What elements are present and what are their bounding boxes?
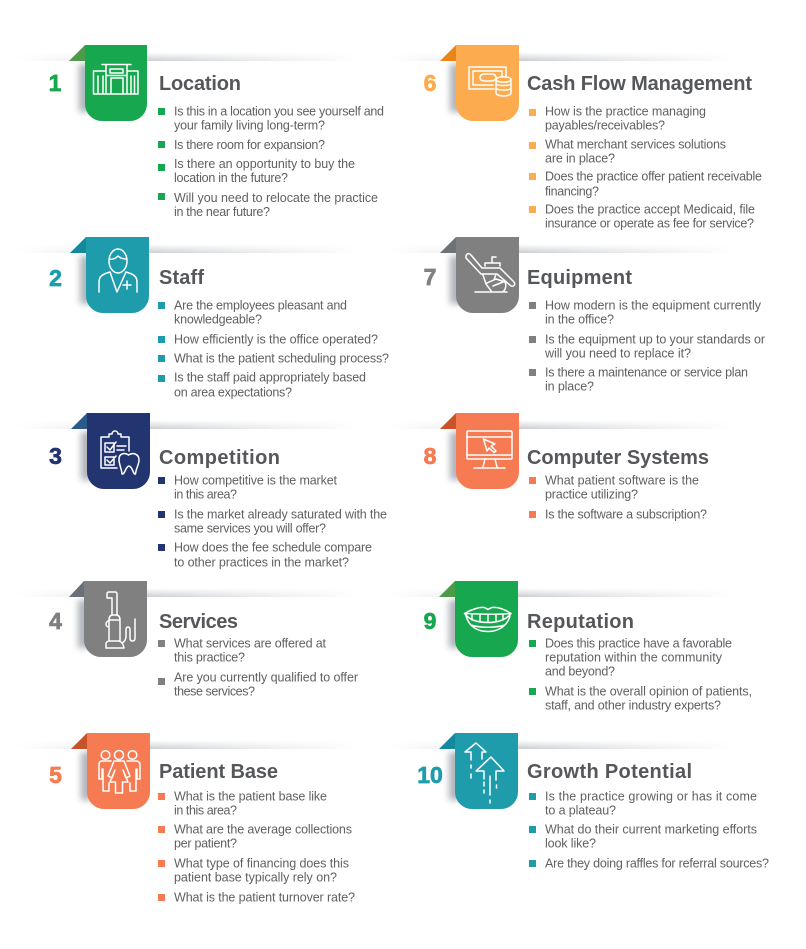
icon tab [455, 581, 518, 657]
checklist: Cash Flow Management: Does the practice accept Medicaid, file [545, 202, 755, 216]
checklist: Cash Flow Management: are in place? [545, 152, 615, 166]
checklist: Equipment: How modern is the equipment currently [545, 298, 762, 312]
card 9: Reputation [390, 581, 752, 712]
number 5: 5 [49, 762, 62, 788]
tab fold [70, 237, 86, 253]
icon: computer monitor [467, 431, 512, 468]
checklist: Staff [158, 298, 389, 400]
icon tab [85, 45, 147, 121]
checklist: Competition: Is the market already saturated with the [174, 508, 387, 522]
number 2: 2 [49, 265, 62, 291]
checklist: Services [158, 636, 358, 698]
checklist: Reputation: Does this practice have a favorable [545, 636, 732, 650]
checklist: Staff: knowledgeable? [174, 312, 262, 326]
checklist: Staff: on area expectations? [174, 386, 292, 400]
tab fold [440, 413, 456, 429]
checklist: Patient Base: in this area? [174, 804, 237, 818]
checklist: Services: these services? [174, 684, 255, 698]
checklist: Location: Is there room for expansion? [174, 138, 325, 152]
heading: Computer Systems: Computer Systems [527, 447, 709, 469]
checklist: Growth Potential: look like? [545, 836, 596, 850]
checklist: Location: location in the future? [174, 171, 288, 185]
number 4: 4 [49, 608, 62, 634]
checklist: Computer Systems: Is the software a subscription? [545, 508, 707, 522]
checklist: Location: Is there an opportunity to buy the [174, 157, 355, 171]
icon tab [87, 413, 150, 489]
icon: dental chair [466, 254, 515, 292]
checklist: Competition: How competitive is the market [174, 474, 338, 488]
checklist: Cash Flow Management: insurance or operate as fee for service? [545, 216, 754, 230]
tab fold [69, 45, 85, 61]
checklist: Equipment [529, 298, 765, 394]
heading: Cash Flow Management: Cash Flow Management [527, 73, 752, 95]
checklist: Location: Is this in a location you see yourself and [174, 104, 384, 118]
checklist: Growth Potential [529, 790, 769, 870]
heading: Patient Base: Patient Base [159, 761, 278, 783]
checklist: Equipment: Is there a maintenance or service plan [545, 366, 748, 380]
tab fold [440, 237, 456, 253]
checklist: Growth Potential: Are they doing raffles for referral sources? [545, 856, 769, 870]
number 6: 6 [424, 70, 436, 96]
checklist: Competition: in this area? [174, 488, 237, 502]
number 9: 9 [424, 608, 436, 634]
heading: Services: Services [159, 611, 238, 633]
checklist: Cash Flow Management: financing? [545, 184, 599, 198]
card 7: Equipment [390, 237, 765, 394]
checklist: Cash Flow Management: What merchant services solutions [545, 138, 726, 152]
tab fold [439, 581, 455, 597]
card 1: Location [48, 45, 384, 216]
checklist: Location: your family living long-term? [174, 118, 325, 132]
icon: building [94, 64, 138, 94]
checklist: Competition [158, 474, 387, 570]
icon: clipboard and tooth [101, 431, 139, 474]
tab fold [71, 413, 87, 429]
checklist: Equipment: Is the equipment up to your standards or [545, 332, 765, 346]
checklist: Reputation [529, 636, 752, 712]
card 6: Cash Flow Management [390, 45, 762, 230]
checklist: Staff: What is the patient scheduling process? [174, 352, 389, 366]
icon tab [455, 733, 518, 809]
checklist: Patient Base: What is the patient turnover rate? [174, 890, 355, 904]
checklist: Competition: to other practices in the market? [174, 556, 349, 570]
checklist: Patient Base [158, 790, 355, 904]
heading: Growth Potential: Growth Potential [527, 761, 692, 783]
checklist: Reputation: reputation within the community [545, 650, 723, 664]
heading: Competition: Competition [159, 447, 280, 469]
checklist: Competition: How does the fee schedule compare [174, 540, 372, 554]
checklist: Services: Are you currently qualified to offer [174, 670, 358, 684]
checklist: Services: this practice? [174, 650, 245, 664]
tab fold [440, 45, 456, 61]
card 2: Staff [15, 237, 389, 400]
checklist: Cash Flow Management [529, 104, 762, 230]
card 10: Growth Potential [390, 733, 769, 870]
checklist: Cash Flow Management: How is the practice managing [545, 104, 706, 118]
checklist: Reputation: and beyond? [545, 664, 615, 678]
heading: Reputation: Reputation [527, 611, 634, 633]
tab fold [439, 733, 455, 749]
icon tab [456, 45, 519, 121]
icon: banknote and coins [469, 67, 511, 96]
icon: smiling lips [464, 607, 511, 632]
icon tab [87, 733, 150, 809]
tab fold [71, 733, 87, 749]
heading: Staff: Staff [159, 267, 204, 289]
checklist: Computer Systems: What patient software is the [545, 474, 699, 488]
checklist: Staff: Is the staff paid appropriately based [174, 370, 366, 384]
checklist: Cash Flow Management: payables/receivables? [545, 118, 665, 132]
checklist: Services: What services are offered at [174, 636, 327, 650]
card 8: Computer Systems [424, 413, 708, 521]
checklist: Patient Base: per patient? [174, 836, 237, 850]
checklist: Competition: same services you will offer? [174, 522, 326, 536]
checklist: Patient Base: What type of financing does this [174, 856, 349, 870]
checklist: Growth Potential: to a plateau? [545, 804, 616, 818]
icon: growth arrows [465, 743, 504, 803]
icon tab [86, 237, 149, 313]
icon: vacuum cleaner [106, 592, 135, 648]
checklist: Equipment: in the office? [545, 312, 614, 326]
checklist: Staff: How efficiently is the office operated? [174, 332, 378, 346]
checklist: Equipment: will you need to replace it? [544, 346, 691, 360]
checklist: Reputation: staff, and other industry experts? [545, 698, 721, 712]
checklist: Growth Potential: What do their current marketing efforts [545, 822, 757, 836]
checklist: Reputation: What is the overall opinion of patients, [545, 684, 752, 698]
icon tab [84, 581, 147, 657]
card 3: Competition [15, 413, 387, 570]
icon: group of people [99, 750, 140, 793]
card 4: Services [48, 581, 358, 696]
checklist: Staff: Are the employees pleasant and [174, 298, 347, 312]
card 5: Patient Base [48, 733, 354, 904]
checklist: Growth Potential: Is the practice growing or has it come [545, 790, 757, 804]
number 7: 7 [424, 264, 436, 290]
checklist: Patient Base: What is the patient base like [174, 790, 327, 804]
icon tab [456, 413, 519, 489]
checklist: Computer Systems [529, 474, 707, 522]
checklist: Patient Base: What are the average collections [174, 822, 352, 836]
checklist: Location [158, 104, 384, 219]
number 8: 8 [424, 443, 437, 469]
checklist: Location: in the near future? [174, 205, 270, 219]
number 10: 10 [417, 762, 443, 788]
heading: Location: Location [159, 73, 241, 95]
checklist: Cash Flow Management: Does the practice offer patient receivable [545, 170, 762, 184]
heading: Equipment: Equipment [527, 267, 632, 289]
tab fold [69, 581, 84, 597]
checklist: Equipment: in place? [545, 380, 594, 394]
number 3: 3 [49, 443, 62, 469]
checklist: Patient Base: patient base typically rely on? [174, 870, 337, 884]
icon tab [456, 237, 519, 313]
icon: doctor [99, 249, 137, 292]
number 1: 1 [49, 70, 62, 96]
checklist: Computer Systems: practice utilizing? [545, 488, 638, 502]
checklist: Location: Will you need to relocate the practice [174, 191, 378, 205]
